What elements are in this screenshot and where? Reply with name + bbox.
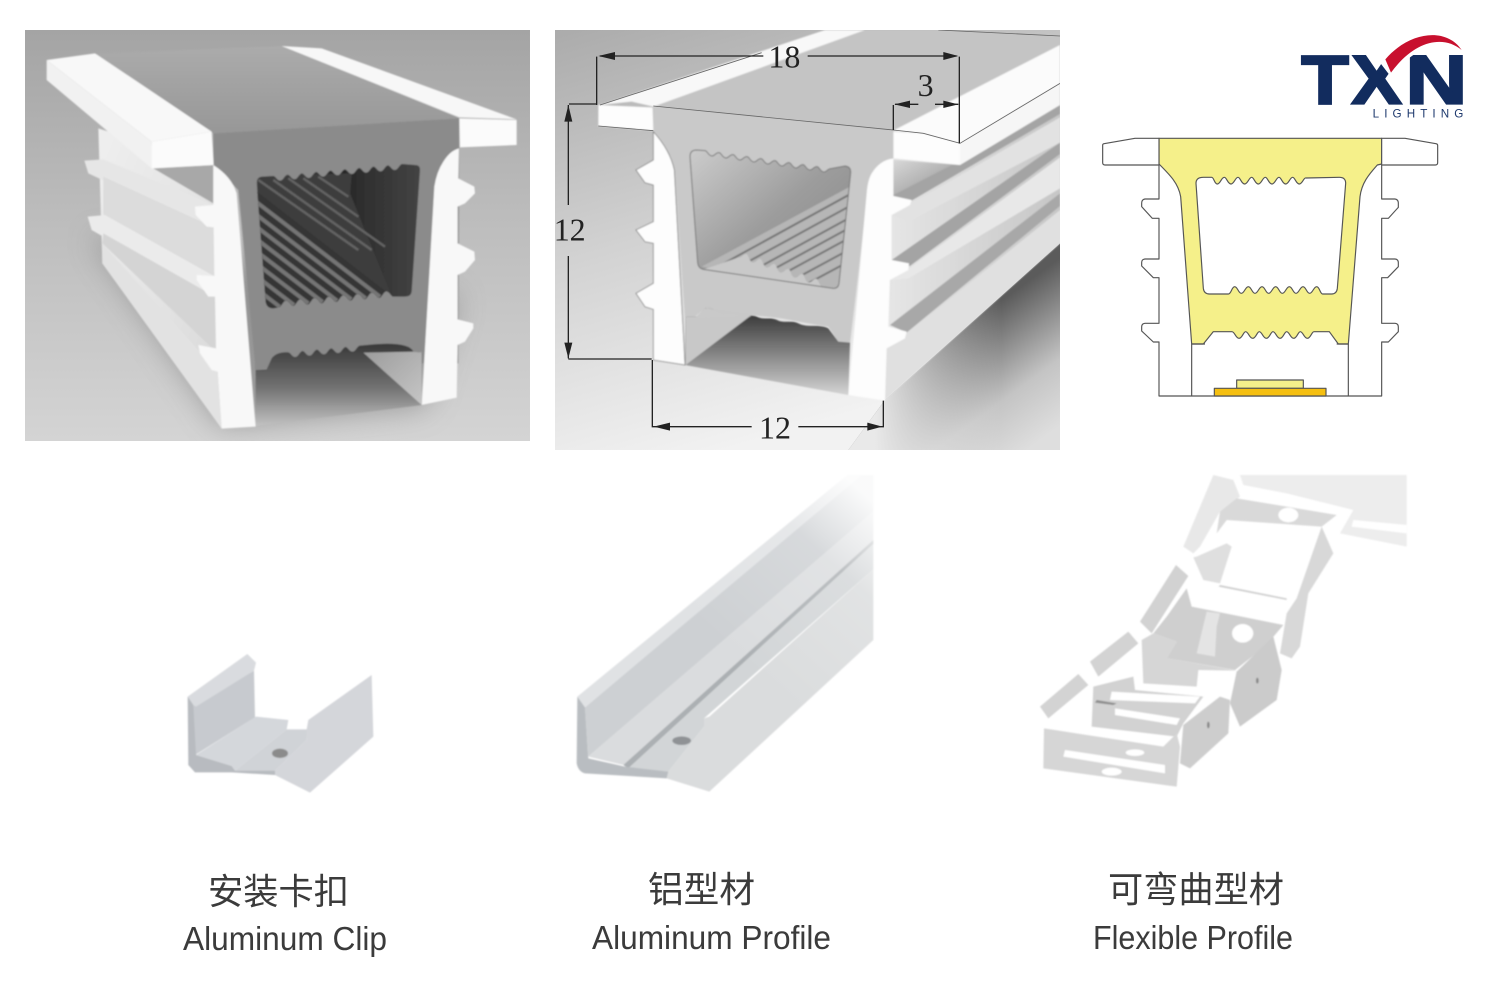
yellow diffuser body [1159,138,1382,344]
front edge [188,697,275,775]
dimension: 12 width: 12 [759,410,791,446]
opening under the cavity [685,308,850,395]
base floor [628,544,873,772]
front edge [577,697,668,778]
inner wall [585,475,873,757]
right leg with barbs [848,158,912,401]
screw hole [272,749,288,758]
accessory: flexible profile [1040,475,1407,787]
raised channel [588,512,873,765]
channel groove [623,540,873,768]
logo tagline: LIGHTING [1373,107,1463,120]
logo letters: T [1301,41,1349,118]
dimension: 18 width [597,39,959,143]
caption: aluminum profile [592,869,831,956]
panel: dimensioned 3D drawing [554,30,1060,450]
right flange [282,46,517,119]
right flange [893,45,1060,143]
left flange [1103,138,1159,165]
outer walls and barbs [1142,165,1398,396]
caption: aluminum clip: Aluminum Clip [183,920,387,957]
opening under the cavity [255,343,422,416]
ground shadow [92,237,458,427]
logo letters: X [1352,42,1402,119]
far faded segment [1240,475,1407,547]
side fins [890,106,1060,333]
left leg with barbs [195,165,256,429]
fade overlay [573,473,877,797]
LED chip [1237,380,1303,388]
caption: flexible profile: Flexible Profile [1093,919,1293,956]
shadow wash [848,304,994,450]
top lip [577,475,862,707]
segment three [1140,565,1283,727]
left flange [598,105,653,131]
caption: flexible profile: 可弯曲型材 [1108,869,1284,910]
side wall with fins [84,128,222,429]
inner cavity [256,164,420,309]
base floor [235,729,307,771]
caption: aluminum profile: 铝型材 [648,869,755,910]
raised channel [196,717,288,771]
dimension: 12 height [554,104,652,359]
cross-section diagram [1103,138,1438,396]
right wall [275,675,373,793]
dimension: 12 width [652,360,883,446]
logo letters [1301,41,1467,119]
inner cavity [688,148,852,290]
top surface [140,81,458,134]
screw hole [672,736,691,745]
segment two [1090,632,1230,768]
caption: flexible profile [1093,869,1293,956]
logo letters: N [1406,42,1467,118]
LED strip [1214,388,1326,396]
caption: aluminum clip: 安装卡扣 [208,871,349,912]
top surface [663,30,900,106]
segment four frame [1183,475,1337,658]
left flange [47,53,212,142]
right side body [885,105,1060,400]
cast shadow [848,243,1060,450]
right wall [667,569,873,792]
right leg with barbs [422,148,475,405]
flange edge lines [598,30,1060,143]
caption: aluminum clip [183,871,387,957]
inner walls [1192,344,1348,396]
dimension: 3 flange: 3 [918,67,934,103]
front face [653,106,893,343]
logo: TXN Lighting [1301,34,1467,120]
caption: aluminum profile: Aluminum Profile [592,919,831,956]
right flange [1382,138,1438,165]
dimension: 18 width: 18 [768,39,800,75]
dimension: 12 height: 12 [554,212,586,248]
logo swoosh [1380,34,1463,77]
segment one [1040,674,1180,787]
accessory: aluminum clip [188,654,373,793]
left wall [188,671,255,765]
dimension: 3 flange [892,75,958,130]
top lip [188,654,256,707]
left flange stripe [600,30,865,107]
front face [213,118,459,370]
left leg with barbs [636,132,685,365]
accessory: aluminum profile [573,473,877,797]
panel: white 3D render of neon profile [25,30,530,441]
